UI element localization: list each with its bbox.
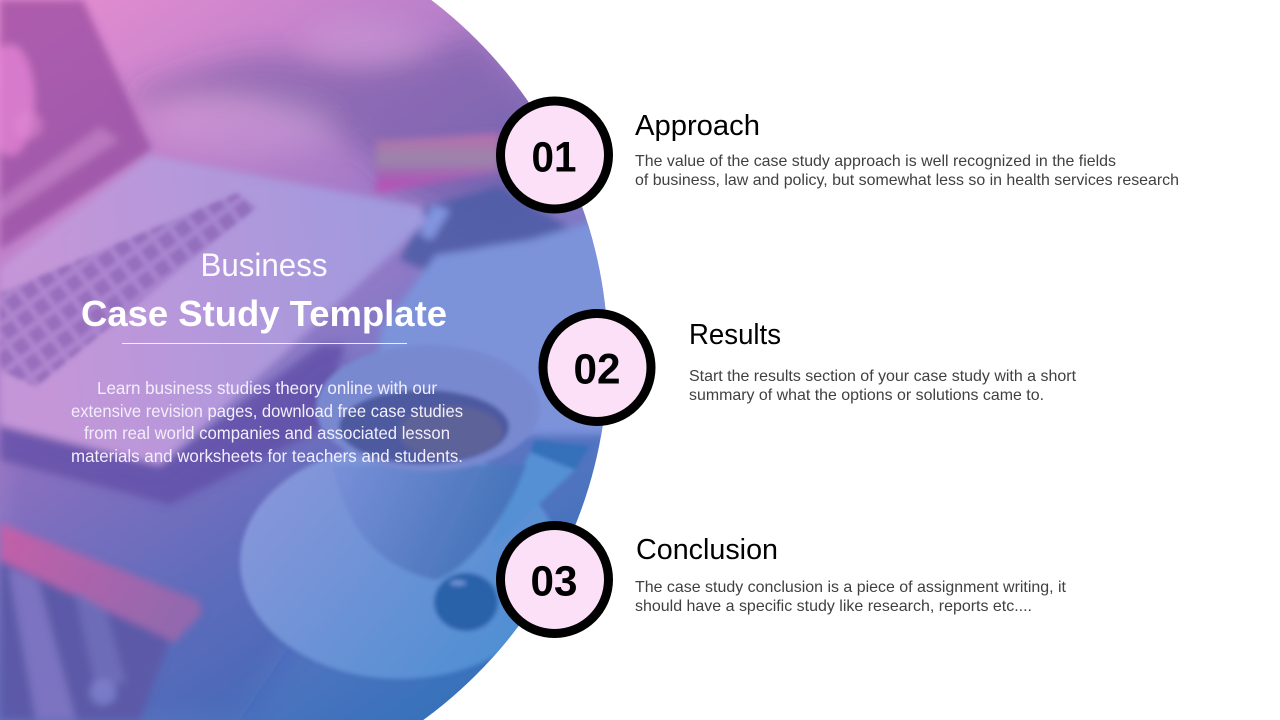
coffee [339,390,509,464]
cup rim [316,345,540,471]
keyboard [0,193,257,387]
panel: photo background with gradient [0,0,620,720]
heading: Case Study Template: Case Study Template [81,293,447,334]
text block: description: materials and worksheets for teachers and students. [71,446,463,466]
tray [530,440,590,470]
shadow below laptop [0,345,345,505]
laptop screen [0,0,152,250]
text block: description: extensive revision pages, download free case studies [71,401,463,421]
soft background tones [0,20,560,720]
rainbow object [376,133,500,193]
phone [0,560,170,720]
section: Conclusion [635,534,1067,615]
badge: 03: 03 [530,558,578,606]
section: Approach: of business, law and policy, but somewhat less so in health services research [635,172,1179,189]
text block: description: Learn business studies theory online with our [97,378,437,398]
badge: 03 [500,526,608,634]
section: Approach [635,110,1179,189]
section: Results: summary of what the options or solutions came to. [689,387,1044,404]
section: Conclusion: The case study conclusion is a piece of assignment writing, it [635,579,1067,596]
section: Conclusion: Conclusion [636,534,778,566]
saucer [240,445,560,679]
heading: Business: Business [200,247,328,283]
section: Results: Results [689,319,781,351]
section: Approach: The value of the case study approach is well recognized in the fields [635,153,1116,170]
cup body [332,465,526,580]
badge: 02: 02 [574,346,620,394]
section: Results: Start the results section of your case study with a short [689,368,1077,385]
right dark table [400,186,570,270]
badge: 01: 01 [532,134,576,182]
small blue object [420,205,450,240]
badge: 02 [543,314,651,422]
badge: 01 [500,101,608,209]
text block: description: from real world companies and associated lesson [84,423,450,443]
divider line [122,343,407,344]
right light surface [375,216,615,435]
spoon [434,573,498,631]
section: Conclusion: should have a specific study like research, reports etc.... [635,598,1032,615]
section: Approach: Approach [635,110,760,142]
laptop base [0,155,426,465]
section: Results [689,319,1077,404]
book [0,523,202,643]
text block: description [71,378,463,466]
